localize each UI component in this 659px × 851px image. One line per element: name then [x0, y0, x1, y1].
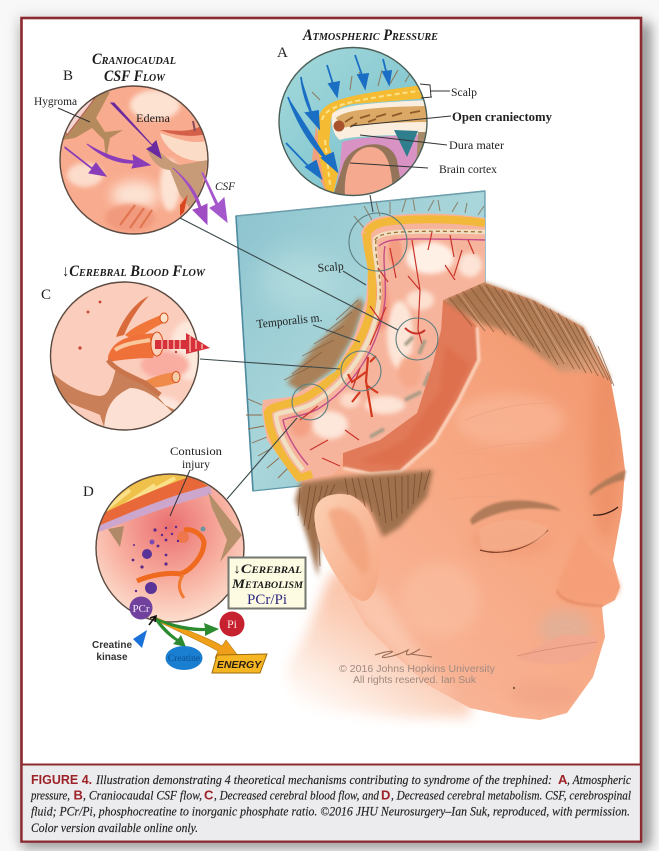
A scalp hair	[312, 70, 410, 100]
anatomical labels: Open craniectomy	[452, 109, 552, 124]
A skull bone	[332, 100, 430, 140]
copyright signature	[339, 649, 496, 686]
PCr molecule	[130, 596, 152, 620]
caption text: B	[74, 788, 83, 802]
anatomical labels: Contusion	[170, 444, 222, 458]
face shading	[345, 360, 622, 707]
head silhouette	[300, 282, 625, 720]
caption text: , Craniocaudal CSF flow,	[83, 788, 202, 802]
label leader lines	[58, 84, 451, 516]
D brown wedges	[108, 526, 124, 547]
anatomical labels: Scalp	[451, 85, 477, 99]
metabolic pathway: Creatine	[168, 654, 200, 664]
energy tag	[212, 654, 267, 673]
red vessels	[300, 232, 474, 466]
B purple arrows	[65, 103, 227, 224]
panel letters: D	[83, 484, 94, 500]
copyright text: All rights reserved. Ian Suk	[353, 674, 477, 686]
black enzyme arrow	[149, 616, 156, 625]
anatomical labels: Temporalis m.	[256, 310, 323, 331]
cerebral metabolism callout	[228, 558, 306, 608]
right eyebrow and eye	[590, 470, 626, 515]
D purple particles	[132, 526, 179, 592]
left eyebrow and eye	[470, 500, 561, 552]
anatomical labels: Edema	[136, 111, 171, 125]
anatomical labels: Brain cortex	[439, 162, 497, 176]
A outer soft tissue	[312, 126, 326, 190]
B sulci	[62, 92, 123, 160]
exposed bone flap defect	[343, 300, 477, 472]
caption text: Illustration demonstrating 4 theoretical mechanisms contributing to syndrome of the trephined:	[95, 772, 552, 787]
scalp band	[268, 219, 485, 478]
anatomical labels: Hygroma	[34, 94, 78, 108]
caption text: Color version available online only.	[31, 820, 198, 835]
C striped arrow	[155, 333, 210, 354]
temporalis hair tufts	[246, 297, 364, 478]
C sulcus	[53, 370, 174, 426]
cutaway scalp hair	[354, 199, 484, 228]
anatomical labels: CSF	[215, 179, 236, 193]
metabolic pathway	[92, 596, 267, 673]
panel C: blood flow	[50, 282, 210, 435]
magnifier rings on cutaway	[292, 213, 438, 420]
A dura and cortex	[336, 134, 418, 184]
panel B: CSF flow	[60, 86, 227, 234]
anatomical labels: Dura mater	[449, 138, 504, 152]
anatomical labels	[34, 85, 552, 471]
title: craniocaudal CSF flow: CSF Flow	[104, 68, 166, 85]
hair top	[443, 282, 614, 386]
panel letters: A	[277, 45, 288, 61]
arrow: energy	[155, 617, 239, 658]
caption panel	[21, 764, 641, 840]
A blue arrows	[286, 55, 391, 178]
caption text: , Atmospheric	[567, 772, 631, 787]
callout heading: Metabolism	[231, 576, 304, 591]
metabolic pathway: PCr	[132, 603, 150, 615]
greyish sulci	[370, 337, 430, 437]
ear	[314, 494, 380, 601]
nose	[557, 530, 620, 606]
panel A: atmospheric pressure	[279, 48, 430, 196]
D artery	[137, 530, 204, 581]
metabolic pathway: Pi	[227, 617, 238, 631]
sideburn hair	[295, 470, 433, 577]
creatine kinase pointer	[133, 630, 147, 648]
callout heading: ↓Cerebral	[233, 561, 303, 576]
neck	[285, 550, 470, 718]
mouth	[513, 635, 597, 689]
panel letters: C	[41, 287, 51, 303]
caption text: A	[558, 772, 568, 787]
arrow: Pi	[156, 618, 219, 636]
metabolic pathway: ENERGY	[217, 659, 262, 671]
caption text: pressure,	[30, 788, 70, 802]
caption text: , Decreased cerebral blood flow, and	[214, 788, 379, 802]
section titles	[62, 27, 438, 280]
A craniectomy site	[334, 120, 344, 132]
C small spots	[78, 301, 177, 353]
caption text: D	[381, 788, 390, 802]
panel letters	[41, 45, 288, 500]
creatine kinase label: kinase	[96, 652, 128, 663]
forehead wrinkles	[450, 403, 570, 500]
PCr/Pi ratio: PCr/Pi	[247, 592, 287, 608]
anatomical labels: Scalp	[317, 259, 344, 275]
caption text: C	[204, 788, 214, 802]
creatine molecule	[166, 646, 202, 670]
title: cerebral blood flow: ↓Cerebral Blood Flow	[62, 263, 206, 280]
title: craniocaudal CSF flow: Craniocaudal	[92, 51, 176, 68]
creatine kinase label: Creatine	[92, 640, 132, 651]
anatomical labels: injury	[182, 457, 210, 471]
D enzyme circles	[142, 549, 152, 559]
teal backing panel	[236, 191, 485, 491]
D scalp layers	[106, 474, 208, 512]
title: atmospheric pressure: Atmospheric Pressure	[302, 27, 438, 44]
C arteries	[116, 296, 149, 337]
Pi molecule	[220, 612, 244, 636]
arrow: creatine	[155, 618, 186, 647]
head and face	[295, 282, 626, 720]
A yellow scalp	[318, 86, 422, 192]
panel D: metabolism	[90, 470, 244, 622]
cutaway brain	[262, 214, 485, 482]
caption text: FIGURE 4.	[31, 773, 92, 787]
panel letters: B	[63, 68, 73, 84]
copyright text: © 2016 Johns Hopkins University	[339, 663, 496, 675]
connector lines	[180, 195, 398, 499]
